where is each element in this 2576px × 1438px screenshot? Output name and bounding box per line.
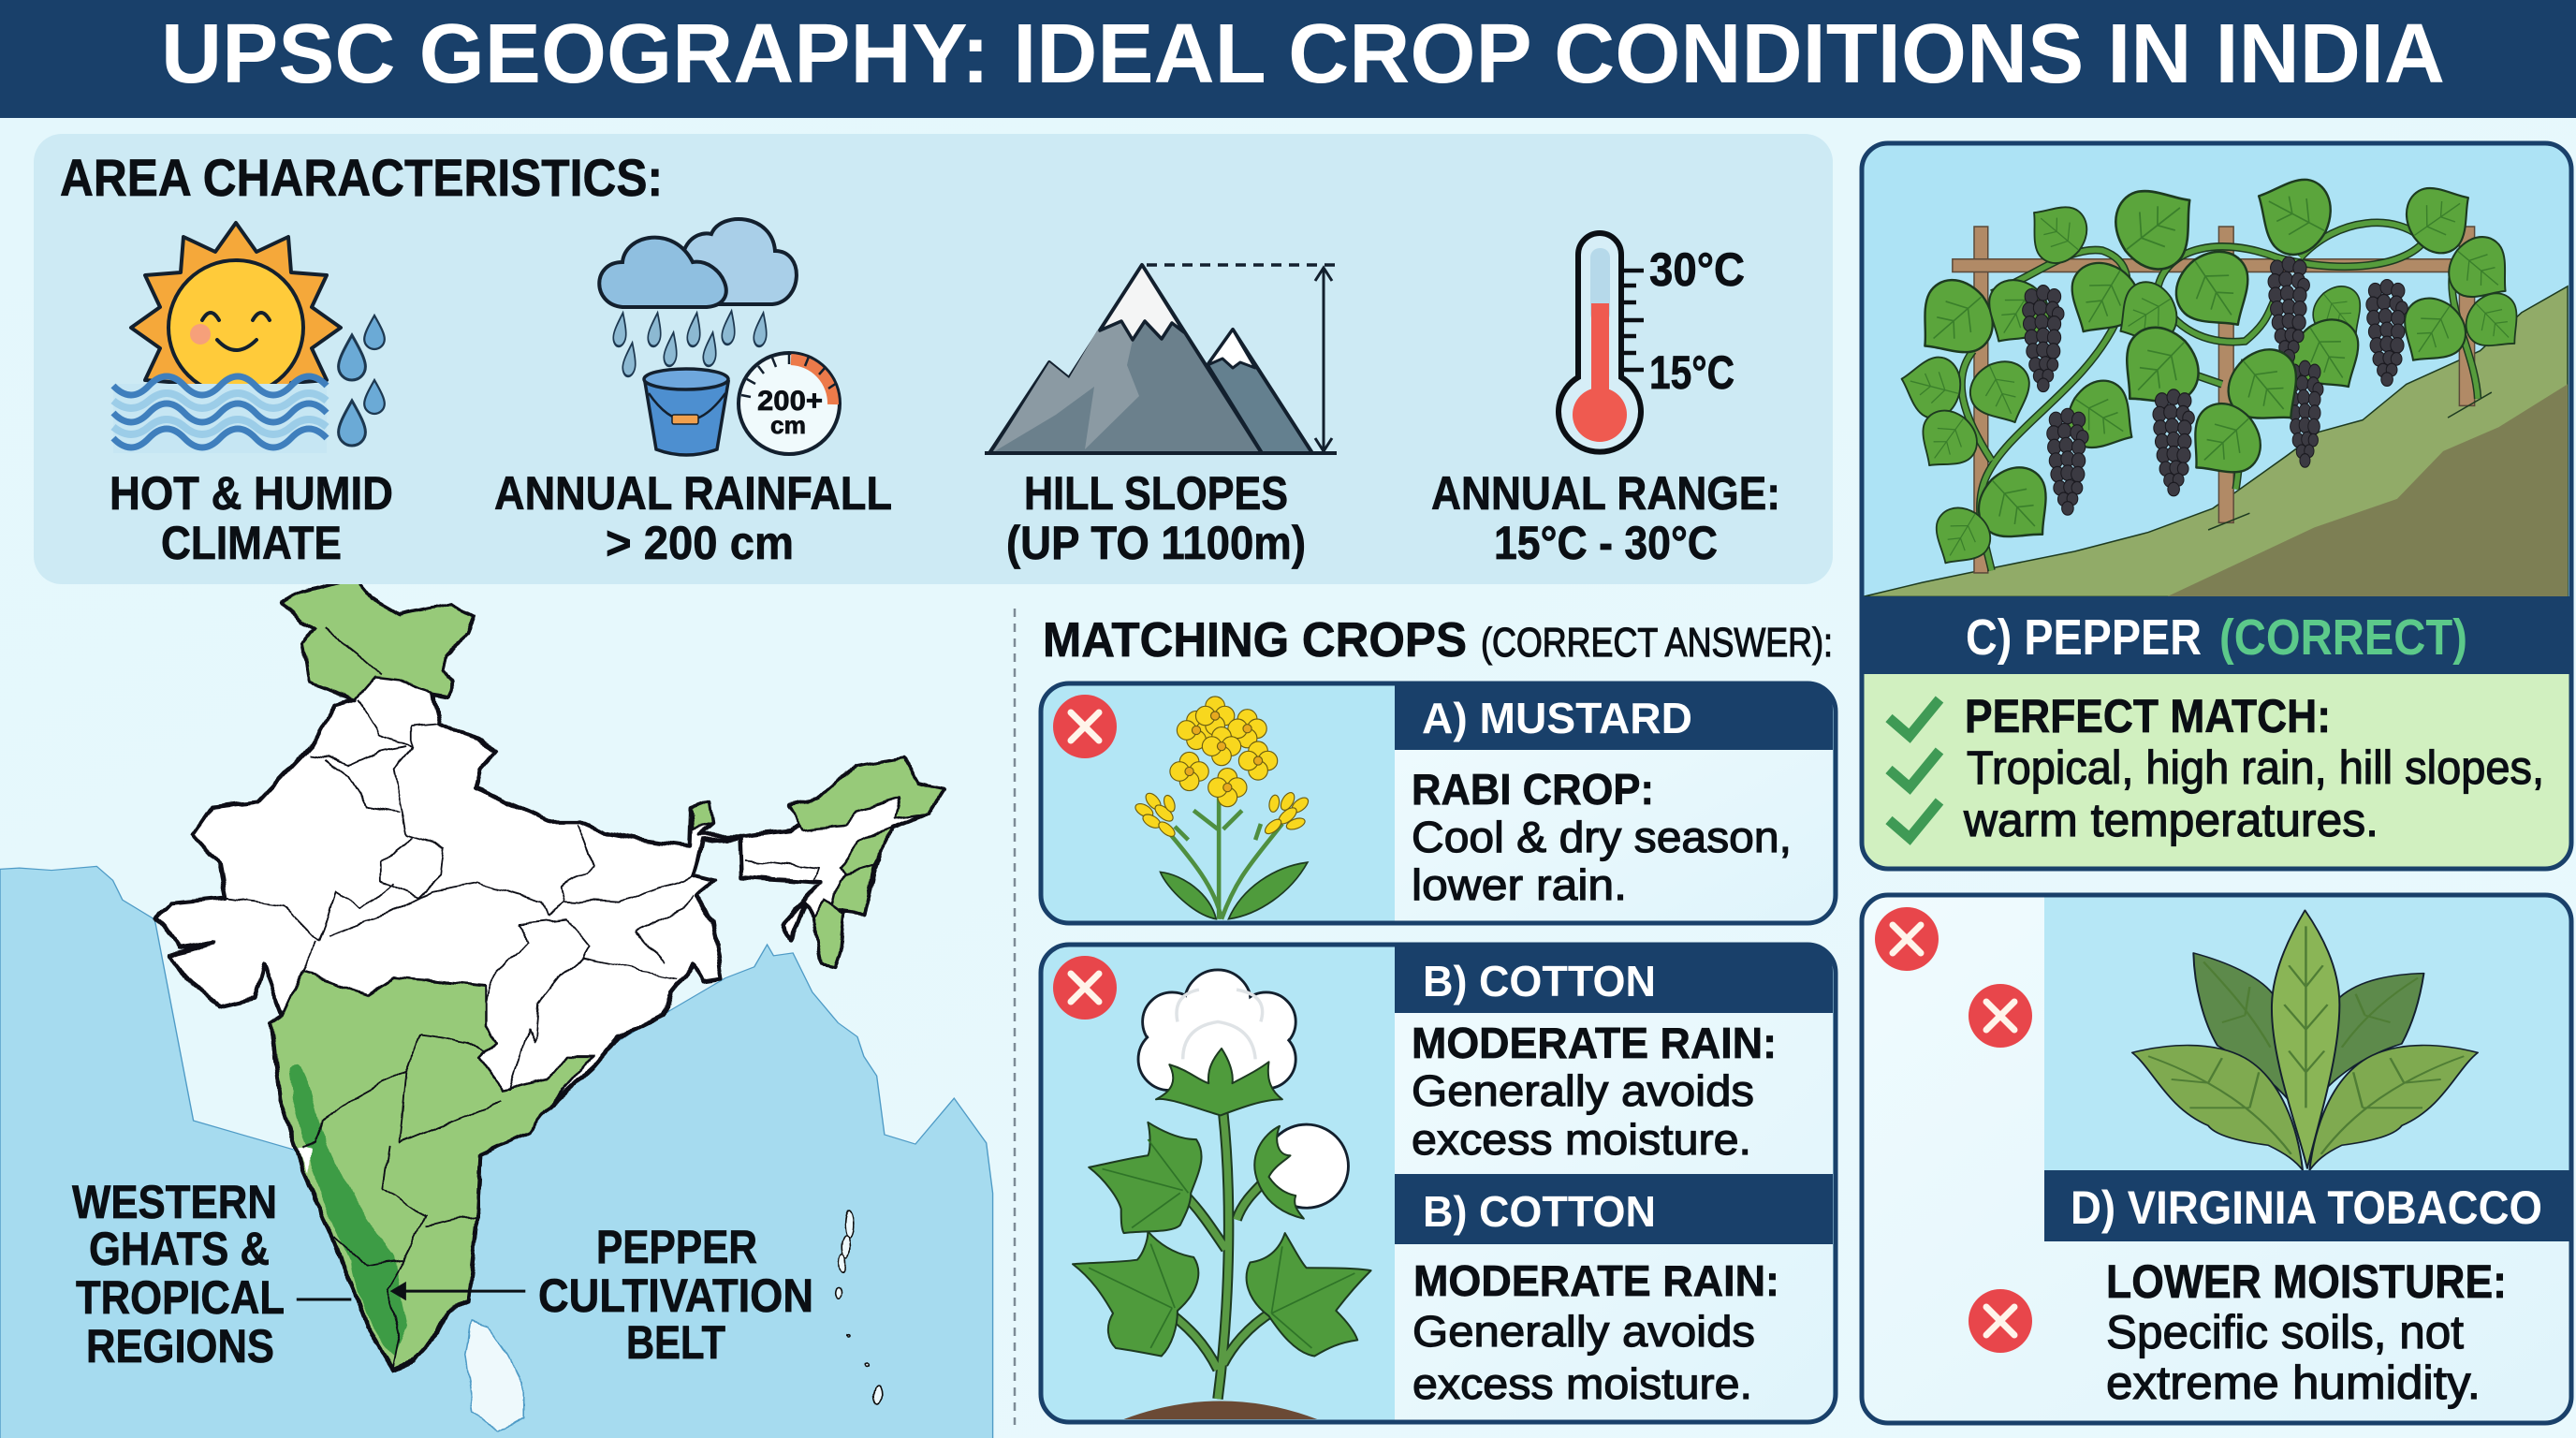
illustration: pepper vines on hillside xyxy=(1863,161,2568,596)
label: western ghats: WESTERN xyxy=(72,1176,277,1228)
banner: virginia tobacco: D) VIRGINIA TOBACCO xyxy=(2071,1181,2542,1234)
text: mustard reason: Cool & dry season, xyxy=(1412,813,1792,861)
text: cotton reason repeat: MODERATE RAIN: xyxy=(1413,1256,1779,1305)
icons: red crosses xyxy=(1875,907,2032,1353)
state borders xyxy=(226,629,819,1367)
text: cotton reason: Generally avoids xyxy=(1412,1066,1754,1115)
green regions xyxy=(271,579,943,1370)
panel: mustard xyxy=(1041,683,1836,923)
pepper belt xyxy=(290,1064,407,1356)
label: hill slopes xyxy=(1006,467,1306,569)
panel: pepper correct answer xyxy=(1862,143,2571,869)
banner: pepper: (CORRECT) xyxy=(2219,609,2467,666)
panel: area characteristics xyxy=(34,134,1833,584)
label: pepper belt: BELT xyxy=(626,1316,725,1369)
illustration: mustard plant xyxy=(1134,697,1310,919)
label: hot and humid: HOT & HUMID xyxy=(110,467,393,520)
illustration: tobacco leaves xyxy=(2132,910,2478,1170)
heading: matching crops xyxy=(1043,613,1833,668)
label: western ghats: TROPICAL xyxy=(76,1271,285,1324)
icon: red cross xyxy=(1053,956,1117,1020)
panel: virginia tobacco xyxy=(1862,895,2571,1423)
text block: perfect match: Tropical, high rain, hill slopes, xyxy=(1967,741,2544,794)
label: annual rainfall xyxy=(494,467,892,569)
icon: rain cloud bucket gauge: 200+ xyxy=(757,386,823,417)
label: annual range: ANNUAL RANGE: xyxy=(1431,467,1780,520)
text block: perfect match xyxy=(1862,674,2571,867)
text block: perfect match: PERFECT MATCH: xyxy=(1965,690,2331,742)
islands xyxy=(834,1211,883,1402)
label: pepper belt xyxy=(538,1221,813,1369)
heading: matching crops: (CORRECT ANSWER): xyxy=(1481,620,1833,666)
heading: area characteristics: AREA CHARACTERISTICS: xyxy=(60,148,663,207)
label: annual range: 15°C - 30°C xyxy=(1494,517,1718,569)
banner: pepper: C) PEPPER xyxy=(1966,609,2202,666)
label: hill slopes: (UP TO 1100m) xyxy=(1006,517,1306,569)
map panel: India pepper belt xyxy=(0,579,993,1438)
icon: sun and water xyxy=(113,223,385,453)
icon: red cross xyxy=(1053,695,1117,758)
label: annual rainfall: > 200 cm xyxy=(606,517,794,569)
text: tobacco reason: Specific soils, not xyxy=(2106,1306,2464,1358)
text: mustard reason xyxy=(1412,765,1792,909)
icon: check marks xyxy=(1889,699,1939,838)
text block: perfect match: warm temperatures. xyxy=(1963,794,2378,846)
icon: mountains xyxy=(985,265,1337,453)
icon: thermometer xyxy=(1559,233,1745,452)
title: UPSC GEOGRAPHY: IDEAL CROP CONDITIONS IN INDIA xyxy=(161,7,2445,101)
arrow to belt xyxy=(297,1282,525,1300)
text: cotton reason repeat: excess moisture. xyxy=(1412,1359,1752,1408)
text: cotton reason: MODERATE RAIN: xyxy=(1412,1019,1777,1067)
Sri Lanka xyxy=(465,1322,523,1431)
card title: mustard: A) MUSTARD xyxy=(1422,694,1692,742)
text: tobacco reason xyxy=(2106,1255,2507,1409)
map of India xyxy=(154,579,943,1431)
label: hot and humid: CLIMATE xyxy=(161,517,342,569)
text: mustard reason: lower rain. xyxy=(1412,860,1627,909)
text: tobacco reason: LOWER MOISTURE: xyxy=(2106,1255,2507,1308)
text: cotton reason: excess moisture. xyxy=(1412,1115,1751,1164)
icon: thermometer: 15°C xyxy=(1649,346,1734,399)
text: cotton reason repeat xyxy=(1412,1256,1779,1408)
illustration: cotton plant xyxy=(1073,970,1371,1419)
label: hill slopes: HILL SLOPES xyxy=(1024,467,1288,520)
text: cotton reason repeat: Generally avoids xyxy=(1412,1307,1755,1356)
label: western ghats: GHATS & xyxy=(89,1223,270,1275)
text: tobacco reason: extreme humidity. xyxy=(2106,1357,2481,1409)
label: annual rainfall: ANNUAL RAINFALL xyxy=(494,467,892,520)
banner: virginia tobacco xyxy=(2044,1170,2569,1241)
label: western ghats xyxy=(72,1176,285,1372)
icon: thermometer: 30°C xyxy=(1649,243,1745,296)
text: mustard reason: RABI CROP: xyxy=(1412,765,1654,814)
label: western ghats: REGIONS xyxy=(86,1320,274,1372)
label: hot and humid xyxy=(110,467,393,569)
heading: matching crops: MATCHING CROPS xyxy=(1043,613,1467,668)
icon: rain cloud bucket gauge xyxy=(599,219,840,455)
banner: pepper xyxy=(1862,596,2571,674)
card title: cotton: B) COTTON xyxy=(1423,957,1656,1005)
sea xyxy=(0,866,993,1438)
text: cotton reason xyxy=(1412,1019,1777,1164)
label: pepper belt: CULTIVATION xyxy=(538,1269,813,1322)
panel: cotton xyxy=(1041,945,1836,1422)
card title: cotton repeat: B) COTTON xyxy=(1423,1187,1656,1236)
label: pepper belt: PEPPER xyxy=(596,1221,757,1273)
label: annual range xyxy=(1431,467,1780,569)
icon: rain cloud bucket gauge: cm xyxy=(770,411,806,439)
